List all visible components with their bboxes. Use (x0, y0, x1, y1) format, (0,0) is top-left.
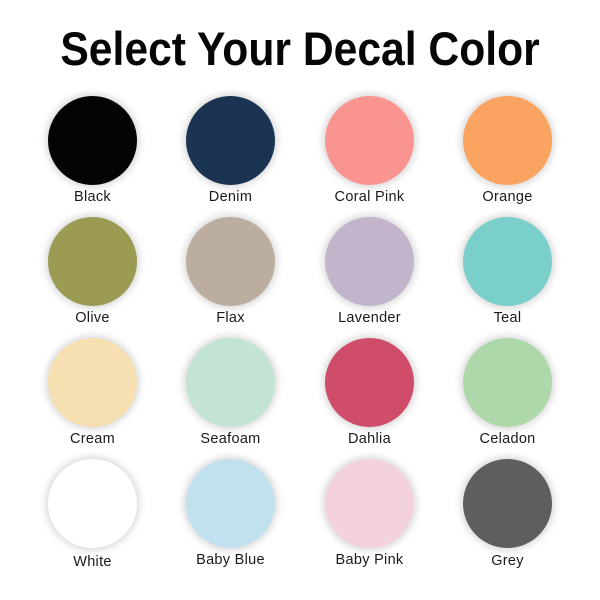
label: Dahlia: Dahlia (348, 431, 391, 447)
swatch: White (48, 459, 137, 548)
swatch: Celadon (463, 338, 552, 427)
swatch: Teal (463, 217, 552, 306)
swatch: Cream (48, 338, 137, 427)
label: Grey: Grey (491, 553, 524, 569)
swatch: Olive (48, 217, 137, 306)
swatch: Flax (186, 217, 275, 306)
label: Baby Pink: Baby Pink (336, 552, 404, 568)
label: Baby Blue: Baby Blue (196, 552, 265, 568)
swatch: Baby Blue (186, 459, 275, 548)
swatch: Grey (463, 459, 552, 548)
label: Teal: Teal (494, 310, 521, 326)
swatch: Seafoam (186, 338, 275, 427)
swatch: Baby Pink (325, 459, 414, 548)
swatch: Lavender (325, 217, 414, 306)
label: Lavender: Lavender (338, 310, 401, 326)
title: Select Your Decal Color (60, 22, 540, 75)
label: Denim: Denim (209, 189, 252, 205)
label: Celadon: Celadon (479, 431, 536, 447)
label: Orange: Orange (482, 189, 533, 205)
label: White: White (73, 554, 112, 570)
label: Black: Black (74, 189, 111, 205)
swatch: Black (48, 96, 137, 185)
swatch: Dahlia (325, 338, 414, 427)
swatch: Coral Pink (325, 96, 414, 185)
swatch: Orange (463, 96, 552, 185)
label: Seafoam: Seafoam (200, 431, 261, 447)
label: Cream: Cream (70, 431, 115, 447)
label: Coral Pink: Coral Pink (335, 189, 404, 205)
label: Flax: Flax (216, 310, 245, 326)
label: Olive: Olive (75, 310, 110, 326)
swatch: Denim (186, 96, 275, 185)
